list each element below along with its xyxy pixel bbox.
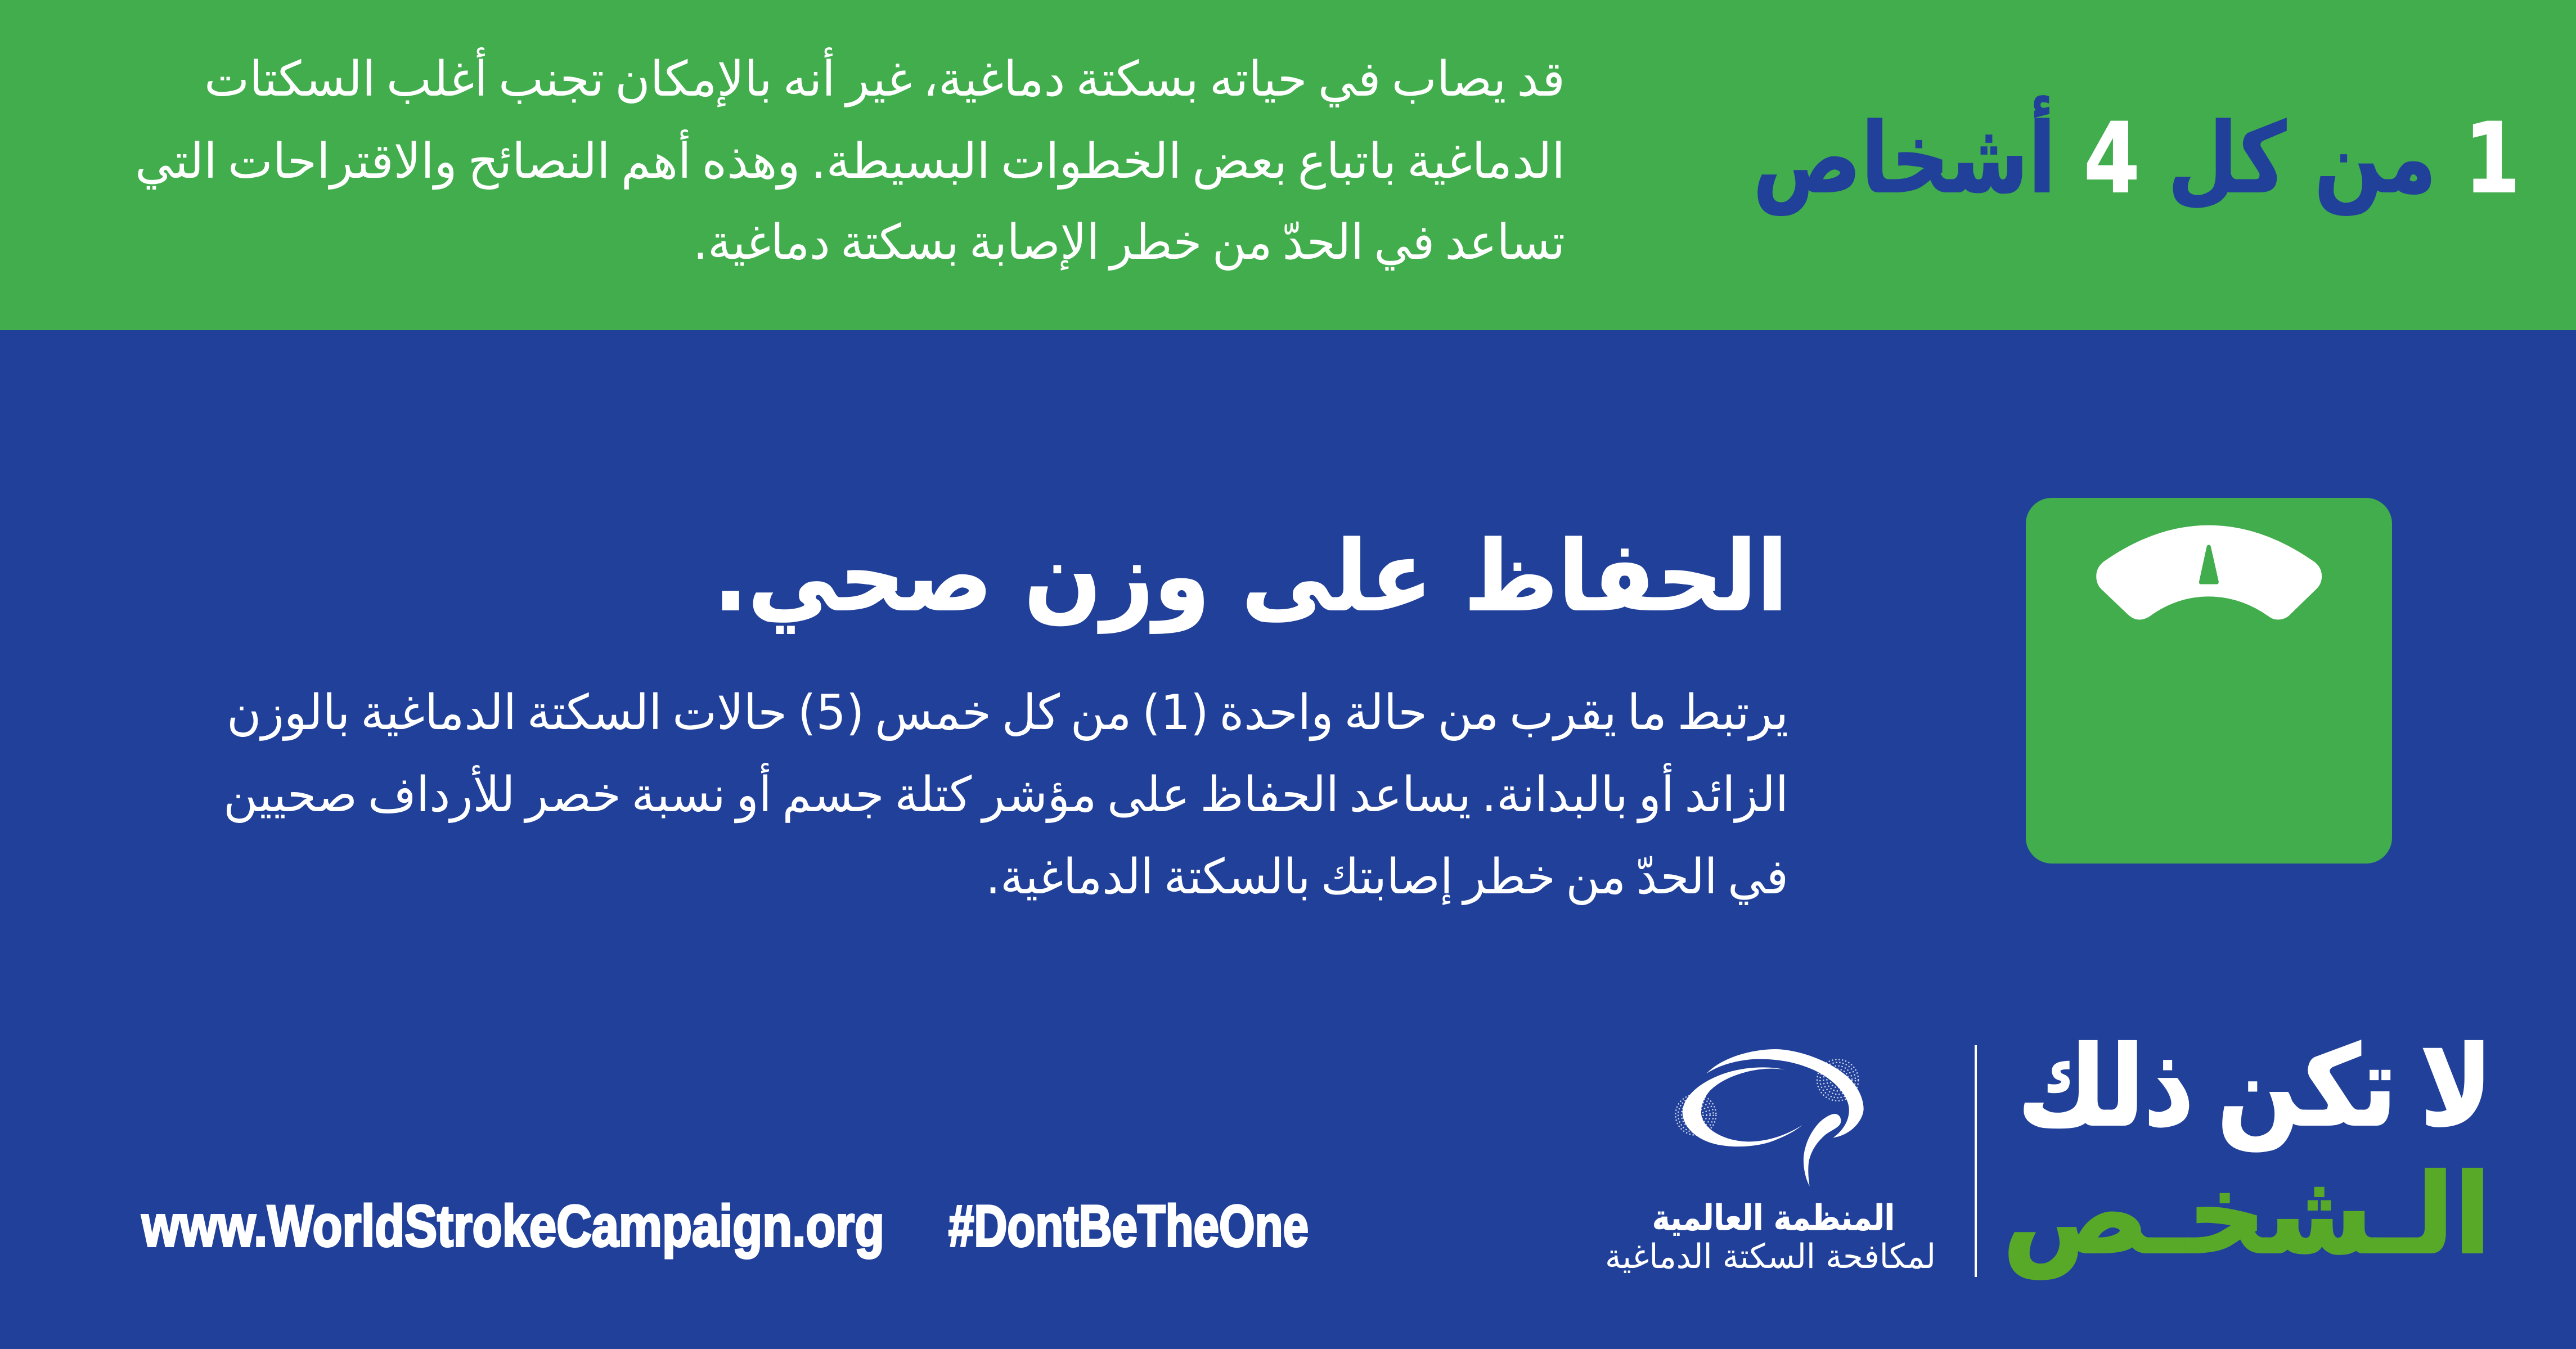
icon: bathroom scale [2026, 498, 2392, 864]
text block: intro paragraph: تساعد في الحدّ من خطر الإصابة بسكتة دماغية. [693, 214, 1565, 271]
tagline: don't be the one: لا تكن ذلك [2018, 1023, 2492, 1152]
tagline: don't be the one: الـشخـص [2003, 1150, 2491, 1279]
logo text: المنظمة العالمية [1652, 1197, 1895, 1238]
headline: 1 in 4 people: 1 من كل 4 أشخاص [1753, 96, 2520, 215]
website and hashtag: #DontBeTheOne [948, 1194, 1309, 1259]
text block: intro paragraph: قد يصاب في حياته بسكتة دماغية، غير أنه بالإمكان تجنب أغلب السكتات [204, 47, 1565, 108]
website and hashtag: www.WorldStrokeCampaign.org [141, 1194, 884, 1259]
logo text: لمكافحة السكتة الدماغية [1605, 1237, 1936, 1276]
text block: body paragraph: الزائد أو بالبدانة. يساعد الحفاظ على مؤشر كتلة جسم أو نسبة خصر للأرداف صحيين [223, 763, 1788, 823]
text block: body paragraph: يرتبط ما يقرب من حالة واحدة (1) من كل خمس (5) حالات السكتة الدماغية بالوزن [227, 685, 1788, 741]
logo mark [1675, 1049, 1864, 1186]
logo: world stroke organization [1605, 1049, 1936, 1276]
heading: maintain a healthy weight: الحفاظ على وزن صحي. [713, 520, 1788, 634]
text block: intro paragraph [135, 47, 1565, 271]
tagline: don't be the one [2003, 1023, 2492, 1279]
divider [1975, 1045, 1977, 1277]
logo text [1605, 1197, 1936, 1276]
text block: body paragraph: في الحدّ من خطر إصابتك بالسكتة الدماغية. [986, 849, 1788, 906]
text block: body paragraph [223, 685, 1788, 906]
text block: intro paragraph: الدماغية باتباع بعض الخطوات البسيطة. وهذه أهم النصائح والاقتراحات التي [135, 129, 1565, 190]
panel: top green banner [0, 0, 2576, 330]
